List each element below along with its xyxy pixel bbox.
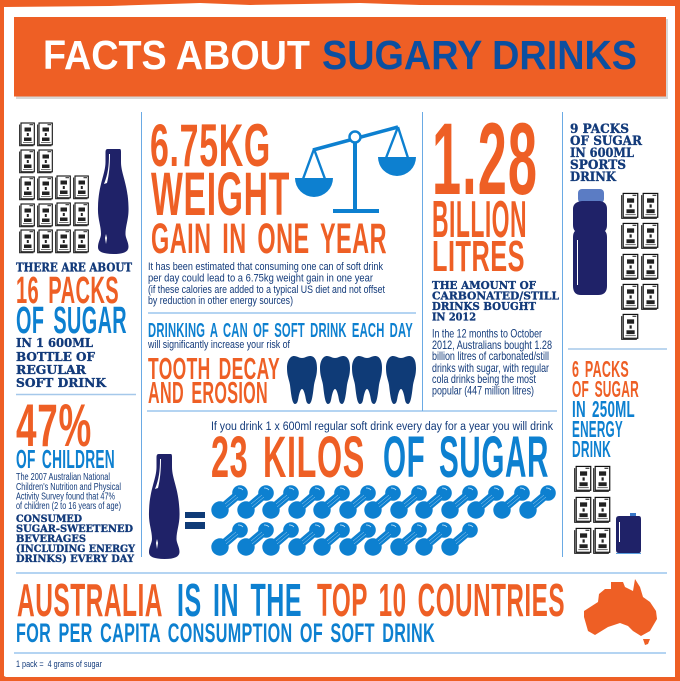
- heading: drinking a can: DRINKING A CAN OF SOFT DRINK EACH DAY: [148, 320, 413, 342]
- body text: survey: Activity Survey found that 47%: [16, 492, 115, 502]
- icon: sports bottle: [573, 189, 607, 295]
- big number 47%: 47%: [16, 392, 92, 459]
- icon: sugar packs, 6: [575, 466, 610, 553]
- heading: Australia in the top 10: IS IN THE: [177, 574, 302, 626]
- panel dividers: [14, 112, 667, 653]
- title text: SUGARY DRINKS: [322, 32, 637, 78]
- heading: 16 packs of sugar: IN 1 600ML: [16, 336, 94, 350]
- heading: 9 packs: 9 PACKS: [570, 122, 629, 137]
- icon: energy drink can: [616, 513, 641, 554]
- body text: weight estimate: per day could lead to a 6.75kg weight gain in one year: [148, 272, 373, 284]
- panel: weight gain: [148, 112, 416, 307]
- body text: 12 months to October: [432, 326, 552, 398]
- heading: 6 packs: DRINK: [572, 436, 611, 462]
- body text: 12 months to October: popular (447 million litres): [432, 384, 534, 398]
- heading: 16 packs of sugar: 16 PACKS: [16, 270, 119, 312]
- icon: dumbbells row two: [211, 522, 478, 556]
- title banner: [14, 17, 668, 99]
- heading: 16 packs of sugar: SOFT DRINK: [16, 376, 107, 390]
- icon: soft drink bottle: [98, 149, 129, 254]
- footnote: 1 pack = 4 grams of sugar: [16, 659, 102, 670]
- heading: 6.75kg weight gain: [150, 112, 387, 263]
- heading: 6 packs: IN 250ML: [572, 396, 635, 422]
- callout: amount bought: [432, 278, 559, 324]
- icon: balance scale: [295, 127, 416, 213]
- heading: 16 packs of sugar: REGULAR: [16, 363, 87, 377]
- heading: 6 packs: 6 PACKS: [572, 356, 629, 382]
- body text: weight estimate: (if these calories are added to a typical US diet and not offset: [148, 284, 385, 296]
- heading: tooth decay and erosion: TOOTH DECAY: [148, 352, 280, 386]
- heading: 16 packs of sugar: OF SUGAR: [16, 300, 127, 342]
- heading: 1.28 billion litres: 1.28: [432, 102, 538, 216]
- heading: 16 packs of sugar: THERE ARE ABOUT: [16, 260, 132, 274]
- body text: weight estimate: by reduction in other energy sources): [148, 295, 293, 307]
- body text: 12 months to October: 2012, Australians bought 1.28: [432, 338, 552, 352]
- title text: [43, 32, 637, 78]
- icon: sugar packs, 9: [622, 193, 658, 339]
- body text: survey: The 2007 Australian National: [16, 472, 110, 483]
- icon: dumbbells row one: [211, 485, 556, 519]
- heading: 6.75kg weight gain: GAIN IN ONE YEAR: [151, 215, 387, 263]
- heading: Australia in the top 10: AUSTRALIA: [17, 574, 163, 626]
- panel: 16 packs in soft drink: [16, 123, 132, 390]
- callout: amount bought: IN 2012: [432, 310, 476, 324]
- panel: Australia top 10: [16, 574, 657, 648]
- body text: survey: of children (2 to 16 years of age): [16, 501, 121, 512]
- heading: 6 packs: [572, 356, 639, 462]
- heading: tooth decay and erosion: [148, 352, 280, 410]
- title text: FACTS ABOUT: [43, 32, 310, 78]
- heading: tooth decay and erosion: AND EROSION: [148, 376, 268, 410]
- text: increased risk: will significantly increase your risk of: [147, 339, 291, 351]
- heading: 9 packs: SPORTS: [570, 158, 626, 173]
- heading: 1.28 billion litres: LITRES: [432, 232, 525, 281]
- body text: 12 months to October: billion litres of carbonated/still: [432, 349, 549, 363]
- callout: consumed beverages: DRINKS) EVERY DAY: [16, 553, 134, 565]
- heading: 9 packs: IN 600ML: [570, 146, 634, 161]
- heading: Australia in the top 10: [17, 574, 565, 626]
- heading: 6.75kg weight gain: 6.75KG: [150, 112, 271, 179]
- panel: 47% of children: [16, 392, 135, 565]
- body text: weight estimate: [148, 261, 385, 307]
- body text: 12 months to October: In the 12 months to October: [432, 326, 542, 340]
- icon: equals sign: [185, 512, 205, 529]
- heading: 9 packs: [570, 122, 642, 185]
- callout: consumed beverages: BEVERAGES: [16, 533, 86, 545]
- panel: energy drink: [572, 356, 641, 554]
- body text: survey: Children's Nutrition and Physical: [16, 482, 121, 493]
- callout: consumed beverages: CONSUMED: [16, 513, 82, 525]
- callout: amount bought: CARBONATED/STILL: [432, 288, 559, 302]
- panel: 1.28 billion litres: [432, 102, 559, 398]
- panel: tooth decay: [147, 320, 416, 410]
- heading: 9 packs: DRINK: [570, 170, 617, 185]
- icon: map of Australia: [584, 579, 657, 645]
- body text: 12 months to October: cola drinks being the most: [432, 372, 536, 386]
- body text: 12 months to October: drinks with sugar, with regular: [432, 361, 549, 375]
- callout: amount bought: DRINKS BOUGHT: [432, 299, 536, 313]
- panel: 1.28 billion litres: BILLION: [432, 191, 527, 249]
- heading: of children: OF CHILDREN: [16, 444, 115, 474]
- icon: sugar packs, 16: [20, 123, 88, 253]
- panel: 23 kilos of sugar: [149, 421, 556, 559]
- heading: 6 packs: ENERGY: [572, 416, 623, 442]
- heading: 1.28 billion litres: [432, 102, 538, 281]
- callout: consumed beverages: [16, 513, 135, 565]
- icon: four teeth: [287, 356, 416, 404]
- callout: consumed beverages: (INCLUDING ENERGY: [16, 543, 135, 555]
- body text: survey: [16, 472, 121, 512]
- panel: sports drink: [570, 122, 658, 339]
- callout: amount bought: THE AMOUNT OF: [432, 278, 537, 292]
- heading: 6.75kg weight gain: WEIGHT: [151, 160, 290, 228]
- body text: weight estimate: It has been estimated that consuming one can of soft drink: [148, 261, 383, 273]
- heading: 9 packs: OF SUGAR: [570, 134, 642, 149]
- icon: bottle: [149, 454, 180, 559]
- text: one bottle a day: If you drink 1 x 600ml regular soft drink every day for a year you will drink: [211, 421, 553, 433]
- heading: 23 kilos of sugar: 23 KILOS: [211, 425, 365, 490]
- heading: 16 packs of sugar: [16, 260, 132, 390]
- heading: 16 packs of sugar: BOTTLE OF: [16, 350, 95, 364]
- callout: consumed beverages: SUGAR-SWEETENED: [16, 523, 133, 535]
